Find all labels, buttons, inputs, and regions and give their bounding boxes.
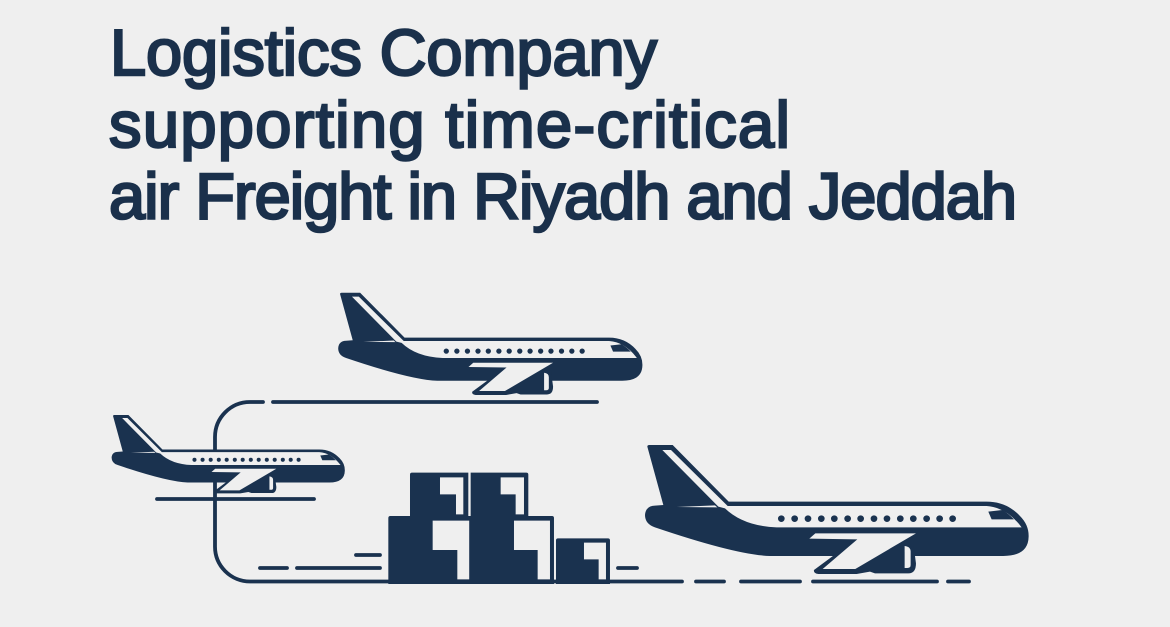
title: supporting time-critical [109, 88, 790, 161]
title [109, 16, 1017, 232]
title: Logistics Company [110, 16, 658, 89]
route lines [157, 402, 969, 582]
title: air Freight in Riyadh and Jeddah [109, 160, 1017, 232]
plane: top [338, 293, 642, 395]
plane: left [112, 415, 345, 493]
cargo boxes [388, 473, 610, 584]
plane: right [645, 445, 1029, 574]
